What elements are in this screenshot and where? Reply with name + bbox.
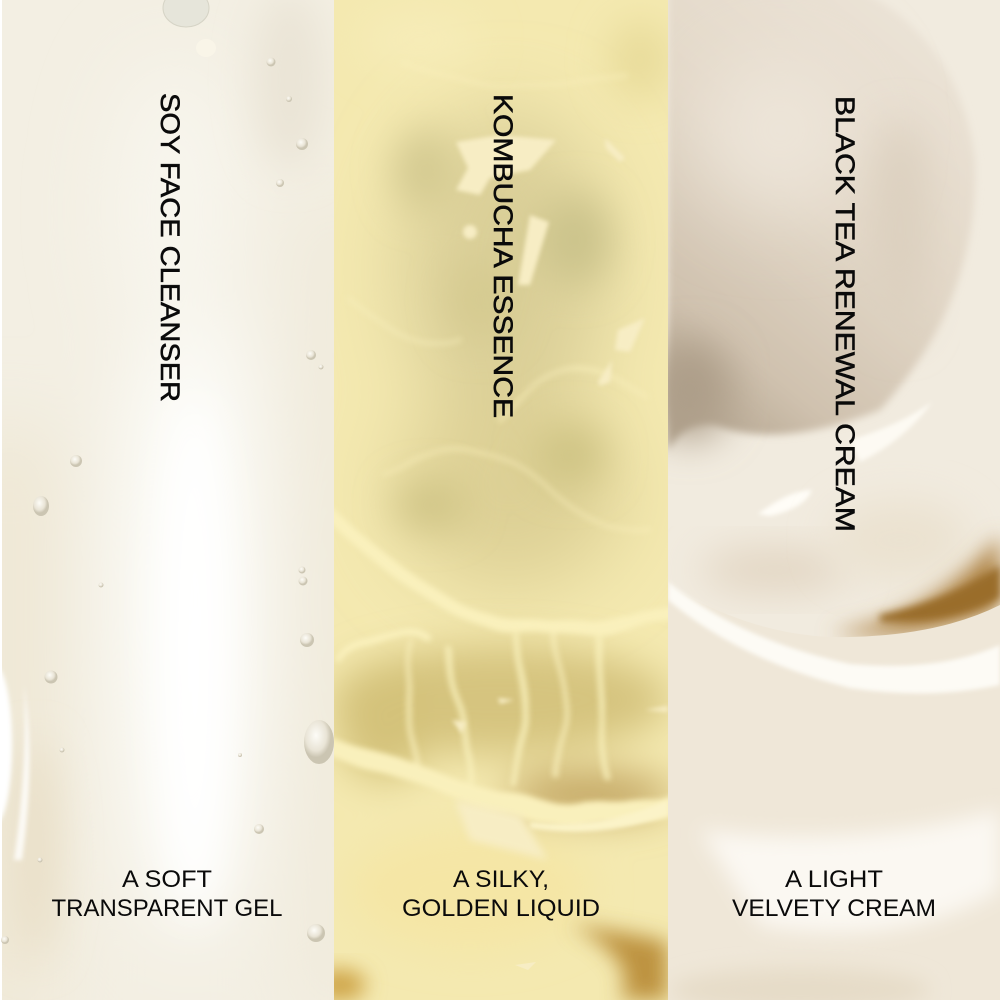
lower cream and white highlights [840,605,1000,648]
caption: a light velvety cream: A LIGHT [785,866,883,893]
caption: a silky golden liquid: A SILKY, [453,866,549,893]
bottom glow and dark edge [455,800,548,860]
title: soy face cleanser: SOY FACE CLEANSER [155,93,185,402]
light ripples [334,340,668,824]
left edge white fold [0,667,12,823]
caption: a silky golden liquid [402,866,600,922]
panel: kombucha essence liquid texture [314,0,680,1000]
caption: a silky golden liquid: GOLDEN LIQUID [402,895,600,922]
title: kombucha essence: KOMBUCHA ESSENCE [488,94,518,418]
title: black tea renewal cream: BLACK TEA RENEWAL CREAM [830,96,860,532]
gold highlights [452,135,668,734]
panel: black tea renewal cream texture [650,0,1000,1000]
panel: soy face cleanser gel texture [0,0,365,1000]
caption: a soft transparent gel: A SOFT [122,866,212,893]
caption: a soft transparent gel [52,866,282,922]
cream swirl [700,402,1000,636]
caption: a light velvety cream [732,866,936,922]
caption: a light velvety cream: VELVETY CREAM [732,895,936,922]
gel bubbles [1,0,334,944]
cream hollow [650,0,975,450]
caption: a soft transparent gel: TRANSPARENT GEL [52,895,282,922]
